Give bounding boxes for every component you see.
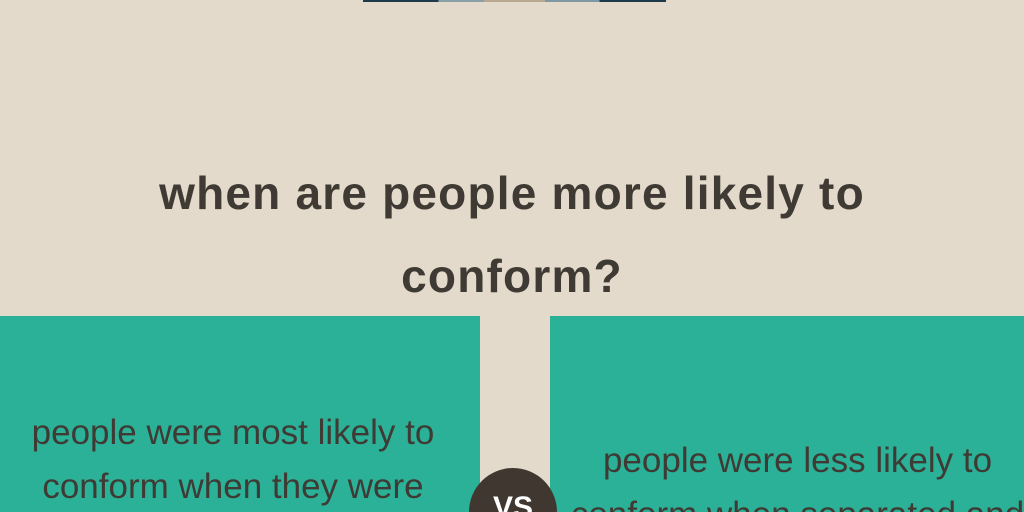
- panel: right: [550, 316, 1024, 512]
- image strip: [363, 0, 666, 2]
- panel: left: [0, 316, 480, 512]
- text: left: [32, 413, 434, 506]
- text: right: people were less likely to: [603, 441, 992, 480]
- text: left: conform when they were: [42, 467, 424, 506]
- text: left: people were most likely to: [32, 413, 434, 452]
- title: when are people more likely to: [159, 167, 865, 219]
- title: [159, 167, 865, 302]
- text: right: [571, 441, 1024, 512]
- title: conform?: [401, 250, 623, 302]
